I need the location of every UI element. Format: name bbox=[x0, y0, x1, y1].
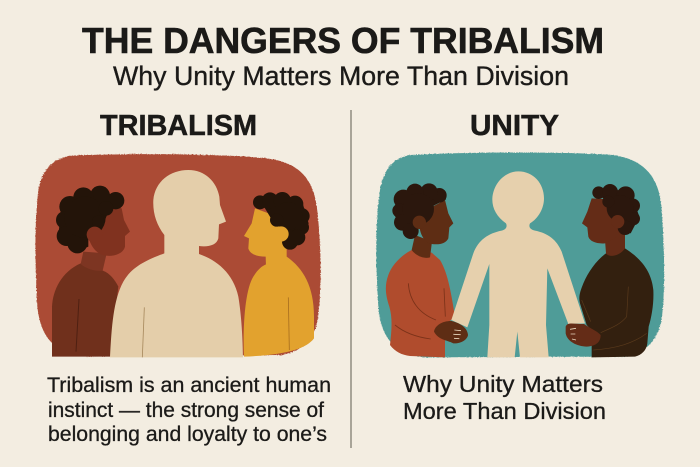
ear bbox=[611, 215, 624, 228]
panel background: red bbox=[35, 154, 321, 357]
text block: tribalism description bbox=[47, 373, 331, 446]
text block: tribalism description: Tribalism is an ancient human bbox=[47, 373, 331, 397]
ear bbox=[413, 216, 426, 229]
hair bbox=[392, 183, 447, 239]
clasped hands: left bbox=[434, 321, 468, 343]
panel: tribalism illustration bbox=[35, 154, 321, 357]
person: cream central figure bbox=[110, 170, 243, 357]
title: THE DANGERS OF TRIBALISM bbox=[82, 20, 604, 61]
ear bbox=[273, 226, 289, 242]
text block: unity description: Why Unity Matters bbox=[403, 371, 603, 397]
person: dark red figure bbox=[52, 186, 130, 357]
subtitle: Why Unity Matters More Than Division bbox=[113, 61, 569, 91]
panel: unity illustration bbox=[376, 152, 664, 357]
heading: unity: UNITY bbox=[470, 110, 559, 142]
hair bbox=[253, 192, 310, 250]
panel background: teal bbox=[376, 152, 664, 357]
hair bbox=[56, 186, 124, 253]
heading: tribalism: TRIBALISM bbox=[100, 110, 257, 142]
clasped hands: right bbox=[566, 323, 601, 347]
hair bbox=[592, 184, 640, 235]
ear bbox=[87, 227, 103, 243]
text block: unity description: More Than Division bbox=[403, 398, 606, 424]
text block: tribalism description: instinct — the strong sense of bbox=[48, 398, 324, 422]
person: figure in red sweater bbox=[386, 183, 455, 357]
person: figure in dark sweater bbox=[579, 184, 653, 357]
person: cream central figure with outstretched arms bbox=[451, 171, 585, 357]
person: yellow figure bbox=[244, 192, 314, 357]
center divider bbox=[350, 110, 352, 448]
text block: unity description bbox=[403, 371, 606, 424]
text block: tribalism description: belonging and loyalty to one’s bbox=[48, 422, 327, 446]
